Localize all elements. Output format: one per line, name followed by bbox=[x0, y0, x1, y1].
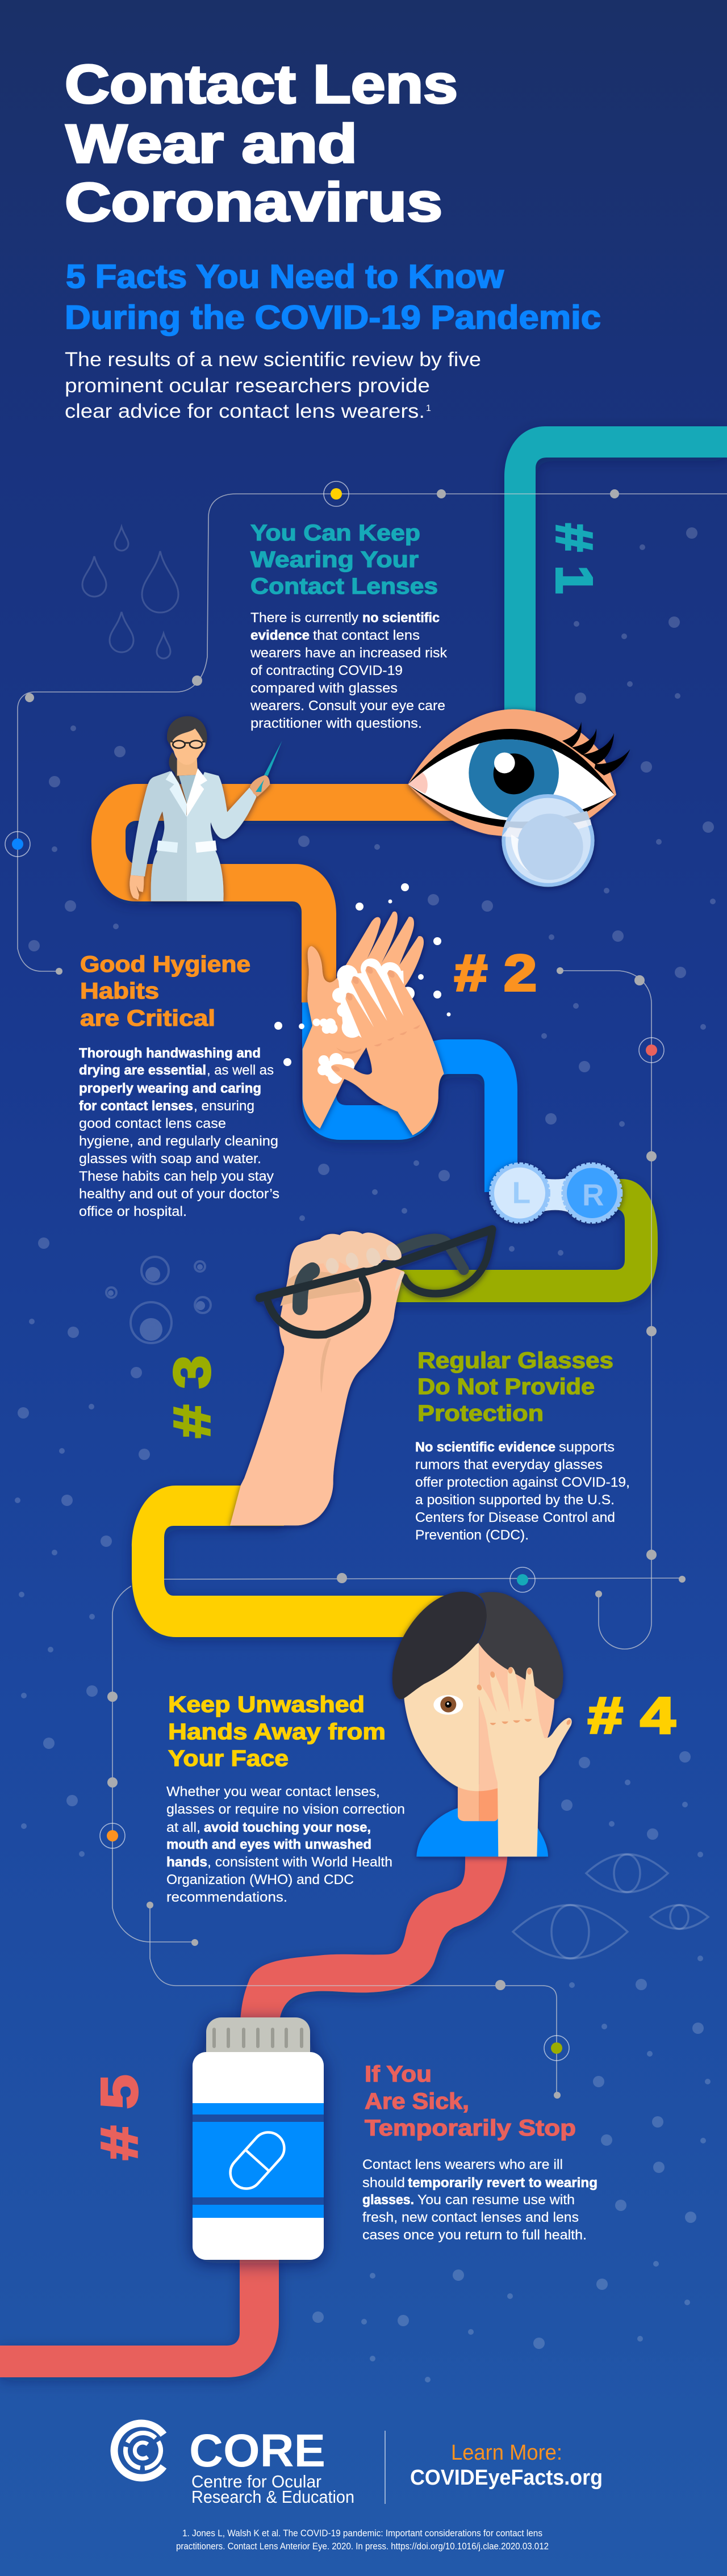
panel 4 text: hands bbox=[166, 1855, 207, 1870]
learn more: Learn More: bbox=[451, 2441, 562, 2465]
title: Wear and bbox=[66, 114, 357, 174]
pipe: olive bbox=[386, 1179, 658, 1302]
intro paragraph: clear advice for contact lens wearers. bbox=[65, 400, 425, 422]
panel 3 text: Prevention (CDC). bbox=[415, 1528, 529, 1543]
illustration: bottle bbox=[193, 2017, 324, 2260]
panel 4 text: Whether you wear contact lenses, bbox=[166, 1784, 380, 1799]
connector lines bbox=[18, 494, 727, 2095]
panel 4 text bbox=[166, 1784, 405, 1905]
panel 4 text: mouth and eyes with unwashed bbox=[166, 1837, 371, 1852]
pipe: blue bbox=[302, 1002, 517, 1192]
panel 3 heading: Regular Glasses bbox=[417, 1348, 613, 1373]
CORE logo mark bbox=[114, 2423, 167, 2478]
panel 2 text: glasses with soap and water. bbox=[79, 1151, 261, 1167]
panel 2 text: drying are essential bbox=[79, 1063, 206, 1078]
background dots bbox=[18, 533, 713, 2380]
panel 1 text: There is currently bbox=[250, 610, 358, 626]
panel 4 heading bbox=[168, 1692, 386, 1771]
connector nodes bbox=[25, 489, 686, 2099]
illustration: eye bbox=[408, 709, 630, 887]
panel 5 text: cases once you return to full health. bbox=[362, 2227, 587, 2243]
decoration: bubbles bbox=[106, 1257, 211, 1343]
panel 1 text: compared with glasses bbox=[250, 681, 398, 696]
panel 5 text: fresh, new contact lenses and lens bbox=[362, 2210, 579, 2225]
panel 3 text bbox=[415, 1440, 630, 1543]
panel 2 text: These habits can help you stay bbox=[79, 1169, 274, 1184]
panel 4 heading: Your Face bbox=[168, 1746, 289, 1771]
panel 4 text: glasses or require no vision correction bbox=[166, 1802, 405, 1817]
panel 1 heading: You Can Keep bbox=[250, 521, 420, 546]
panel 5 text bbox=[362, 2157, 598, 2243]
panel 4 text: avoid touching your nose, bbox=[204, 1820, 371, 1835]
panel 2 heading: are Critical bbox=[80, 1006, 215, 1031]
illustration: lens case bbox=[490, 1164, 621, 1222]
ringed nodes bbox=[5, 481, 664, 2061]
panel 1 heading: Contact Lenses bbox=[250, 574, 438, 599]
number 2: # 2 bbox=[454, 945, 537, 1002]
panel 4 text: recommendations. bbox=[166, 1890, 287, 1905]
panel 5 heading: Temporarily Stop bbox=[365, 2116, 576, 2141]
panel 1 text: wearers. Consult your eye care bbox=[250, 698, 445, 714]
subtitle bbox=[65, 258, 601, 336]
CORE wordmark: Research & Education bbox=[191, 2487, 354, 2507]
panel 1 text: evidence bbox=[250, 628, 310, 643]
title: Contact Lens bbox=[65, 54, 458, 115]
panel 3 text: rumors that everyday glasses bbox=[415, 1457, 603, 1472]
panel 1 heading bbox=[250, 521, 438, 599]
decoration: eye outlines bbox=[513, 1854, 708, 1958]
pipe: teal bbox=[504, 426, 727, 715]
panel 4 text: Organization (WHO) and CDC bbox=[166, 1872, 354, 1887]
number 1: # 1 bbox=[545, 523, 602, 594]
panel 2 heading: Habits bbox=[80, 979, 159, 1004]
panel 4 text: , consistent with World Health bbox=[207, 1855, 392, 1870]
panel 2 text: healthy and out of your doctor’s bbox=[79, 1186, 279, 1202]
panel 4 heading: Hands Away from bbox=[168, 1719, 386, 1744]
learn more: COVIDEyeFacts.org bbox=[410, 2466, 603, 2490]
panel 4 heading: Keep Unwashed bbox=[168, 1692, 365, 1717]
panel 3 text: Centers for Disease Control and bbox=[415, 1510, 615, 1525]
intro paragraph: The results of a new scientific review by five bbox=[65, 349, 481, 371]
panel 3 text: offer protection against COVID-19, bbox=[415, 1475, 630, 1490]
number 4: # 4 bbox=[588, 1688, 675, 1744]
illustration: lens case: L bbox=[512, 1176, 530, 1210]
panel 2 text: , ensuring bbox=[194, 1098, 254, 1114]
panel 3 text: supports bbox=[559, 1440, 615, 1455]
CORE wordmark: Centre for Ocular bbox=[191, 2472, 321, 2491]
panel 1 text: that contact lens bbox=[313, 628, 420, 643]
panel 5 heading: If You bbox=[365, 2062, 432, 2087]
panel 5 text: You can resume use with bbox=[417, 2192, 575, 2208]
decoration: water droplets bbox=[82, 527, 178, 658]
panel 3 heading: Protection bbox=[417, 1401, 544, 1426]
panel 5 text: temporarily revert to wearing bbox=[408, 2175, 598, 2191]
panel 2 text: , as well as bbox=[207, 1063, 274, 1078]
title: Coronavirus bbox=[65, 172, 442, 233]
CORE wordmark bbox=[189, 2425, 354, 2507]
panel 3 heading bbox=[417, 1348, 613, 1426]
panel 2 heading bbox=[80, 952, 250, 1031]
panel 1 text bbox=[250, 610, 448, 731]
footer divider bbox=[385, 2431, 386, 2504]
number 5: # 5 bbox=[91, 2075, 148, 2160]
number 3: # 3 bbox=[164, 1356, 221, 1438]
illustration: person touching face bbox=[392, 1592, 572, 1857]
illustration: hand holding glasses bbox=[230, 1230, 492, 1525]
panel 1 text: no scientific bbox=[362, 610, 440, 626]
intro paragraph: 1 bbox=[426, 404, 431, 413]
subtitle: During the COVID-19 Pandemic bbox=[65, 299, 601, 336]
panel 3 text: No scientific evidence bbox=[415, 1440, 555, 1455]
subtitle: 5 Facts You Need to Know bbox=[66, 258, 504, 295]
panel 1 text: of contracting COVID-19 bbox=[250, 663, 403, 678]
panel 2 text: hygiene, and regularly cleaning bbox=[79, 1134, 278, 1149]
panel 1 text: wearers have an increased risk bbox=[250, 645, 448, 661]
panel 1 text: practitioner with questions. bbox=[250, 716, 422, 731]
illustration: lens case: R bbox=[582, 1178, 604, 1212]
panel 5 text: glasses. bbox=[362, 2192, 414, 2208]
panel 1 heading: Wearing Your bbox=[250, 547, 419, 572]
panel 2 text: office or hospital. bbox=[79, 1204, 187, 1219]
panel 3 text: a position supported by the U.S. bbox=[415, 1492, 615, 1508]
intro paragraph bbox=[65, 349, 481, 422]
footnote bbox=[176, 2528, 549, 2552]
panel 2 text: Thorough handwashing and bbox=[79, 1046, 261, 1061]
panel 2 heading: Good Hygiene bbox=[80, 952, 250, 977]
illustration: washing hands bbox=[303, 912, 444, 1135]
CORE wordmark: CORE bbox=[189, 2425, 325, 2477]
footnote: practitioners. Contact Lens Anterior Eye. 2020. In press. https://doi.org/10.1016/j.clae.2020.03.012 bbox=[176, 2541, 549, 2552]
panel 3 heading: Do Not Provide bbox=[417, 1374, 595, 1399]
footnote: 1. Jones L, Walsh K et al. The COVID-19 pandemic: Important considerations for contact lens bbox=[182, 2528, 542, 2539]
panel 4 text: at all, bbox=[166, 1820, 200, 1835]
panel 2 text: properly wearing and caring bbox=[79, 1081, 261, 1096]
panel 2 text bbox=[79, 1046, 279, 1219]
panel 5 text: Contact lens wearers who are ill bbox=[362, 2157, 563, 2172]
panel 2 text: for contact lenses bbox=[79, 1098, 193, 1114]
pipe: coral bbox=[0, 1851, 508, 2377]
title bbox=[65, 54, 458, 233]
panel 2 text: good contact lens case bbox=[79, 1116, 226, 1131]
learn more bbox=[410, 2441, 603, 2490]
soap drops bbox=[274, 883, 451, 1066]
illustration: scientist bbox=[129, 716, 282, 901]
panel 5 text: should bbox=[362, 2175, 405, 2191]
panel 5 heading bbox=[365, 2062, 576, 2141]
panel 5 heading: Are Sick, bbox=[365, 2089, 469, 2114]
pipe: yellow bbox=[132, 1486, 454, 1637]
pipe: orange bbox=[91, 784, 545, 1002]
intro paragraph: prominent ocular researchers provide bbox=[65, 375, 430, 397]
